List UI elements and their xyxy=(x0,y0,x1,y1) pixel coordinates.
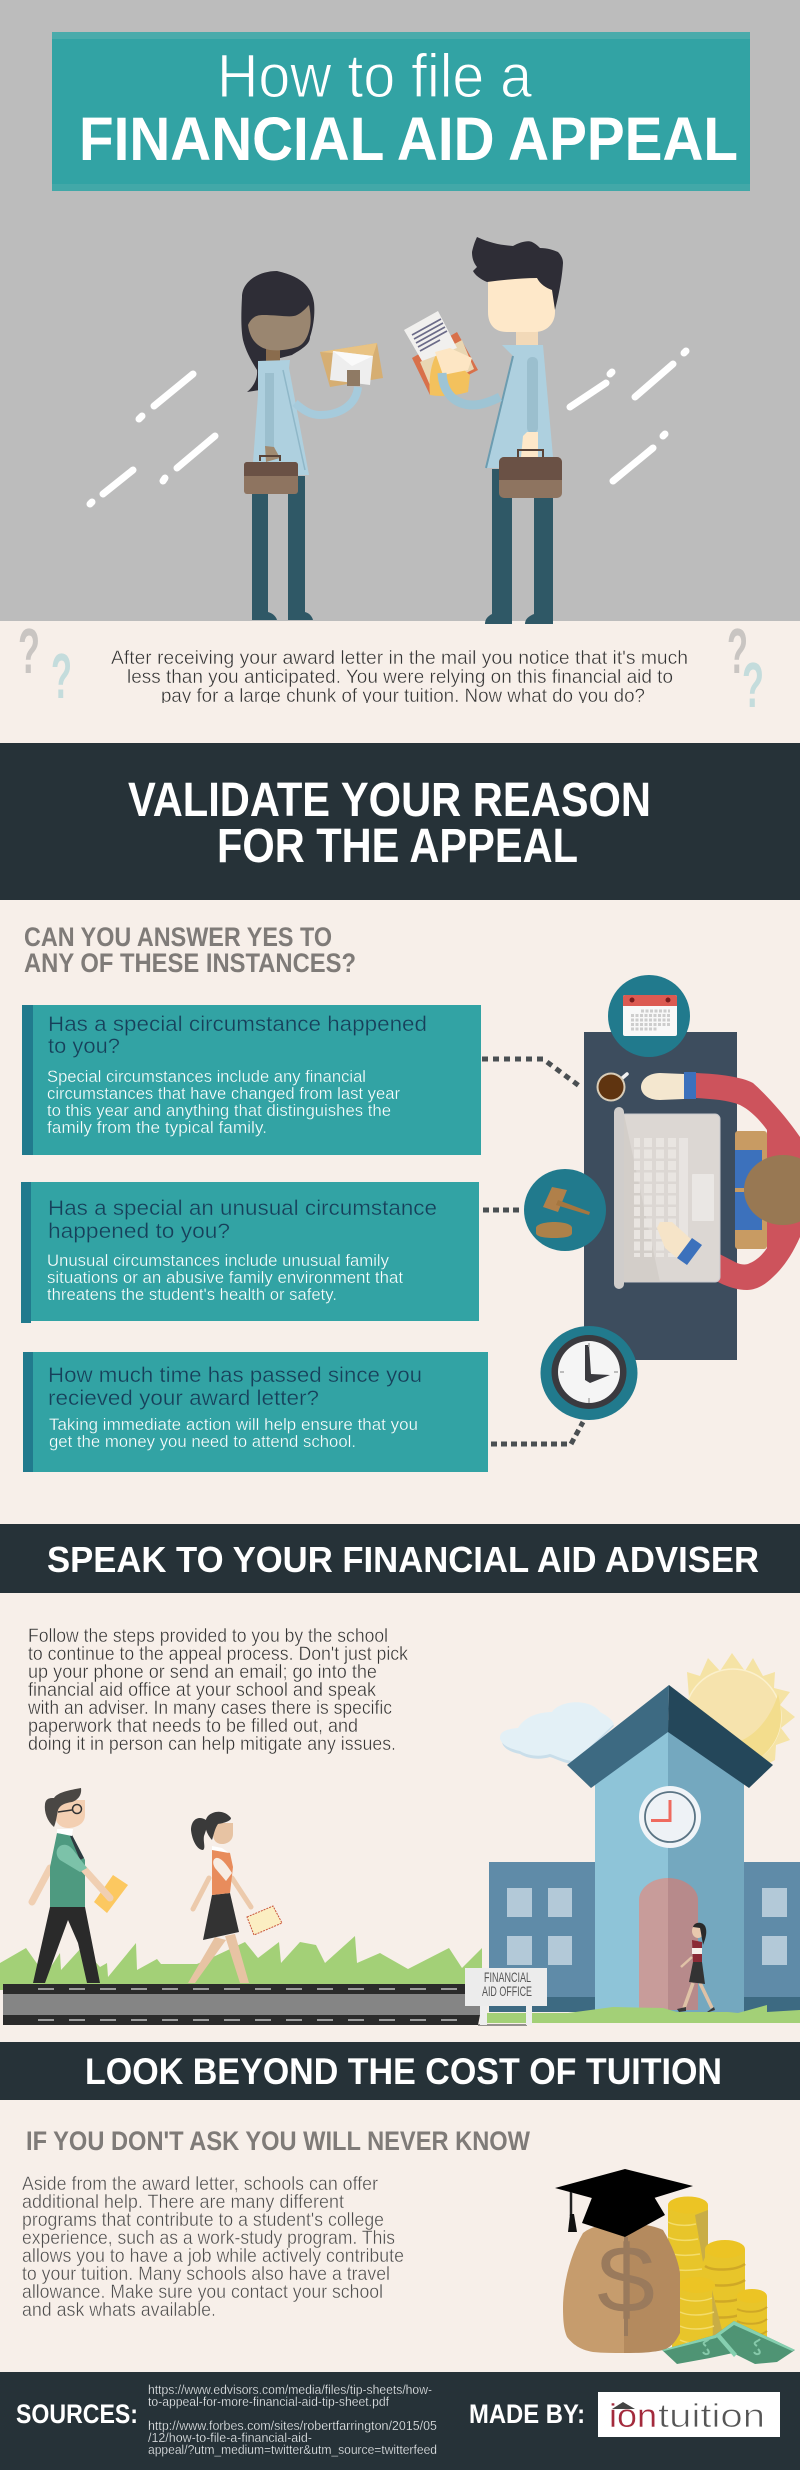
subheading: can you answer yes: ANY OF THESE INSTANCES? xyxy=(24,948,356,978)
heading: look beyond cost: LOOK BEYOND THE COST OF TUITION xyxy=(85,2051,722,2092)
laptop xyxy=(614,1107,720,1289)
text block: additional help: Aside from the award letter, schools can offer xyxy=(22,2173,378,2195)
illustration: coins, bag and cap xyxy=(555,2169,795,2364)
sources label: SOURCES: xyxy=(16,2399,138,2429)
panel: special circumstance: circumstances that have changed from last year xyxy=(47,1084,400,1103)
title banner: FINANCIAL AID APPEAL xyxy=(79,105,738,173)
illustration: grass xyxy=(0,1936,482,1990)
panel: intro xyxy=(18,615,764,721)
connector: dotted line 3 xyxy=(491,1422,583,1444)
heading: look beyond cost xyxy=(0,2042,800,2100)
sign: financial aid office: FINANCIAL xyxy=(484,1969,531,1985)
sources list: http://www.forbes.com/sites/robertfarrington/2015/05 xyxy=(148,2418,437,2433)
text block: additional help: additional help. There are many different xyxy=(22,2191,345,2213)
panel: unusual circumstance: Unusual circumstances include unusual family xyxy=(47,1251,389,1270)
text block: adviser steps: Follow the steps provided to you by the school xyxy=(28,1625,388,1647)
panel: special circumstance: to you? xyxy=(48,1035,120,1058)
icon: coffee cup xyxy=(596,1072,627,1102)
text block: adviser steps xyxy=(27,1625,408,1755)
title banner xyxy=(52,32,750,191)
subheading: if you don't ask: IF YOU DON'T ASK YOU WILL NEVER KNOW xyxy=(26,2126,530,2156)
panel: time passed: How much time has passed since you xyxy=(48,1364,422,1387)
banknotes xyxy=(662,2321,795,2364)
sign: financial aid office xyxy=(465,1968,547,2025)
panel: special circumstance xyxy=(22,1005,481,1155)
text block: additional help: allowance. Make sure you contact your school xyxy=(22,2281,383,2303)
sources list: /12/how-to-file-a-financial-aid- xyxy=(148,2430,312,2445)
text block: additional help: to your tuition. Many schools also have a travel xyxy=(22,2263,390,2285)
logo: iontuition xyxy=(598,2392,780,2437)
person at desk xyxy=(687,1073,800,1290)
illustration: coins, bag and cap: $ xyxy=(597,2226,655,2333)
icon: calendar xyxy=(608,975,690,1057)
sources list xyxy=(148,2382,437,2457)
text block: adviser steps: to continue to the appeal process. Don't just pick xyxy=(28,1643,408,1665)
text block: adviser steps: with an adviser. In many cases there is specific xyxy=(27,1697,392,1719)
icon: motion dashes left xyxy=(90,374,215,504)
heading: validate your reason: FOR THE APPEAL xyxy=(217,820,578,873)
money bag xyxy=(563,2223,624,2353)
illustration: lower lawn xyxy=(487,2005,800,2023)
icon: motion dashes right xyxy=(570,351,686,481)
intro text: less than you anticipated. You were relying on this financial aid to xyxy=(127,666,673,688)
panel: time passed: Taking immediate action will help ensure that you xyxy=(49,1415,418,1434)
text block: additional help xyxy=(22,2173,404,2321)
made by label: MADE BY: xyxy=(469,2399,585,2429)
text block: adviser steps: paperwork that needs to be filled out, and xyxy=(28,1715,358,1737)
text block: additional help: programs that contribute to a student's college xyxy=(22,2209,384,2231)
panel: unusual circumstance: Has a special an unusual circumstance xyxy=(48,1197,437,1220)
sources list: https://www.edvisors.com/media/files/tip-sheets/how- xyxy=(148,2382,432,2397)
connector: dotted line 2 xyxy=(483,1208,520,1212)
text block: additional help: allows you to have a job while actively contribute xyxy=(22,2245,404,2267)
woman holding envelope xyxy=(241,271,383,620)
sources list: to-appeal-for-more-financial-aid-tip-sheet.pdf xyxy=(148,2394,389,2409)
icon: gavel xyxy=(524,1169,606,1251)
icon: question marks right: ? xyxy=(727,615,748,687)
panel: time passed xyxy=(23,1352,488,1472)
panel: footer xyxy=(0,2372,800,2470)
panel: time passed: get the money you need to attend school. xyxy=(49,1432,356,1451)
intro text xyxy=(111,647,688,707)
hands on desk xyxy=(641,1072,702,1265)
panel: special circumstance: to this year and anything that distinguishes the xyxy=(47,1101,391,1120)
panel: time passed: recieved your award letter? xyxy=(48,1387,319,1410)
heading: validate your reason xyxy=(0,743,800,900)
illustration: road xyxy=(3,1984,527,2026)
figure: woman at door xyxy=(677,1923,715,2012)
icon: question marks left: ? xyxy=(18,615,40,687)
text block: additional help: experience, such as a work-study program. This xyxy=(22,2227,395,2249)
logo: iontuition: tuition xyxy=(658,2397,765,2434)
panel: special circumstance: Special circumstances include any financial xyxy=(47,1067,366,1086)
heading: speak to adviser xyxy=(0,1524,800,1593)
title banner: How to file a xyxy=(217,42,532,110)
text block: additional help: and ask whats available. xyxy=(22,2299,216,2321)
panel: unusual circumstance: threatens the student's health or safety. xyxy=(47,1285,337,1304)
logo: iontuition: ion xyxy=(609,2397,657,2434)
panel: unusual circumstance: situations or an abusive family environment that xyxy=(47,1268,403,1287)
panel: special circumstance: family from the typical family. xyxy=(47,1118,267,1137)
icon: question marks left xyxy=(18,615,72,712)
panel: unusual circumstance xyxy=(21,1182,479,1323)
text block: adviser steps: doing it in person can help mitigate any issues. xyxy=(28,1733,396,1755)
building clock xyxy=(639,1786,701,1848)
text block: adviser steps: up your phone or send an email; go into the xyxy=(28,1661,377,1683)
icon: question marks right xyxy=(727,615,764,721)
illustration: school building xyxy=(489,1685,800,2013)
panel: special circumstance: Has a special circumstance happened xyxy=(48,1013,427,1036)
heading: speak to adviser: SPEAK TO YOUR FINANCIAL AID ADVISER xyxy=(47,1539,759,1580)
heading: validate your reason: VALIDATE YOUR REASON xyxy=(128,774,651,827)
panel: hero xyxy=(0,0,800,624)
graduation cap xyxy=(555,2169,693,2237)
intro text: After receiving your award letter in the mail you notice that it's much xyxy=(111,647,688,669)
subheading: can you answer yes: CAN YOU ANSWER YES TO xyxy=(24,922,332,952)
illustration: sun xyxy=(685,1653,795,1780)
man holding letter xyxy=(404,237,563,624)
figure: woman walking xyxy=(188,1812,282,1983)
connector: dotted line 1 xyxy=(482,1059,582,1088)
sign: financial aid office: AID OFFICE xyxy=(482,1983,532,1999)
subheading: can you answer yes xyxy=(24,922,356,978)
illustration: desk from above xyxy=(584,1032,800,1360)
coin stacks xyxy=(668,2196,767,2348)
illustration: cloud xyxy=(500,1702,614,1764)
text block: adviser steps: financial aid office at your school and speak xyxy=(28,1679,376,1701)
intro text: pay for a large chunk of your tuition. Now what do you do? xyxy=(161,685,645,707)
icon: clock xyxy=(540,1326,638,1420)
icon: question marks right: ? xyxy=(742,649,764,721)
sources list: appeal/?utm_medium=twitter&utm_source=twitterfeed xyxy=(148,2442,437,2457)
figure: man walking xyxy=(32,1788,128,1983)
panel: unusual circumstance: happened to you? xyxy=(48,1220,230,1243)
icon: question marks left: ? xyxy=(51,640,72,712)
